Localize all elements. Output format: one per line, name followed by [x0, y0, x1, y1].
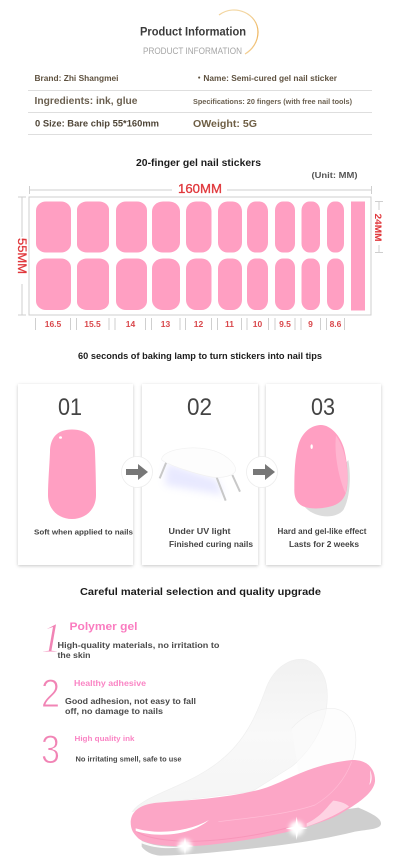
nail width labels: 8.6 [330, 319, 342, 329]
nail height dimension [372, 202, 383, 252]
highlight edge [136, 820, 209, 835]
nail width labels: 13 [161, 319, 170, 329]
heading: 20-finger gel nail stickers: 20-finger gel nail stickers [136, 158, 261, 169]
caption: Lasts for 2 weeks [289, 540, 360, 549]
subheading: PRODUCT INFORMATION [143, 46, 242, 57]
nail height dimension: 24MM [372, 213, 383, 242]
nail width labels: 12 [194, 319, 203, 329]
caption: Finished curing nails [169, 540, 254, 549]
nail width labels: 14 [126, 319, 135, 329]
sparkle left [176, 837, 194, 855]
numeral 1: 1 [41, 616, 62, 662]
spec table [28, 73, 372, 134]
size diagram [15, 182, 383, 330]
sparkle right [286, 817, 308, 840]
feature text [58, 640, 220, 660]
nail row: bottom [36, 258, 344, 310]
nail width labels: 9.5 [279, 319, 291, 329]
caption: Hard and gel-like effect [278, 527, 367, 536]
feature text: Good adhesion, not easy to fall [65, 696, 196, 706]
spec: ingredients: Ingredients: ink, glue [34, 95, 138, 107]
icon: hard gel nail [294, 425, 350, 516]
panel: step 03 [266, 384, 381, 565]
panel: step 01 [18, 384, 133, 565]
spec: brand: Brand: Zhi Shangmei [34, 73, 118, 83]
spec: specifications: Specifications: 20 fingers (with free nail tools) [193, 97, 352, 106]
feature title: High quality ink [74, 734, 135, 743]
numeral 2: 2 [41, 672, 60, 716]
decorative arc [219, 10, 258, 54]
sheet frame [29, 197, 371, 315]
product illustration: curved gel nail [131, 659, 381, 856]
shadow [142, 808, 381, 856]
nail row: top [36, 202, 344, 252]
nail strip [351, 202, 365, 310]
heading: baking lamp: 60 seconds of baking lamp to turn stickers into nail tips [78, 351, 322, 361]
numeral 3: 3 [41, 728, 60, 772]
arrow 1 [122, 456, 152, 488]
nail width labels: 15.5 [84, 319, 101, 329]
caption [168, 527, 254, 549]
pink gel base [131, 760, 375, 846]
nail width ticks [36, 318, 344, 330]
nail width labels: 16.5 [45, 319, 62, 329]
spec: weight: OWeight: 5G [193, 118, 257, 130]
height dimension [15, 197, 29, 315]
icon: soft nail [48, 430, 96, 519]
step number 03: 03 [311, 394, 335, 421]
feature text: off, no damage to nails [65, 706, 163, 716]
step number 01: 01 [58, 394, 82, 421]
feature title: Polymer gel [70, 621, 138, 633]
caption: Under UV light [168, 527, 231, 536]
feature 2 [41, 672, 196, 716]
nail width labels: 9 [308, 319, 313, 329]
heading: material selection: Careful material selection and quality upgrade [80, 586, 321, 598]
feature 3 [41, 728, 182, 772]
translucent overlay outline [218, 762, 352, 822]
nail width labels: 11 [225, 319, 234, 329]
lower rim [135, 825, 298, 841]
feature title: Healthy adhesive [74, 678, 146, 688]
translucent layer 1 [132, 659, 327, 812]
title block [140, 10, 258, 57]
unit note: (Unit: MM) [312, 170, 358, 180]
panel: step 02 [142, 384, 258, 565]
height dimension: 55MM [15, 238, 29, 274]
caption: Soft when applied to nails [34, 528, 133, 536]
step number 02: 02 [187, 394, 212, 421]
width dimension [30, 182, 372, 196]
spec: size: 0 Size: Bare chip 55*160mm [35, 118, 159, 128]
nail width labels [45, 319, 342, 329]
translucent layer 2 [292, 708, 356, 817]
feature text [65, 696, 196, 716]
feature text: No irritating smell, safe to use [76, 756, 182, 764]
arrow 2 [246, 456, 278, 488]
spec: name: ・Name: Semi-cured gel nail sticker [195, 73, 338, 83]
nail width labels: 10 [253, 319, 262, 329]
heading: Product Information: Product Information [140, 24, 246, 38]
width dimension: 160MM [178, 182, 222, 196]
feature text: High-quality materials, no irritation to [58, 640, 220, 650]
feature text: the skin [58, 650, 90, 660]
icon: UV lamp [160, 448, 240, 501]
caption [278, 527, 367, 549]
feature 1 [41, 616, 220, 662]
